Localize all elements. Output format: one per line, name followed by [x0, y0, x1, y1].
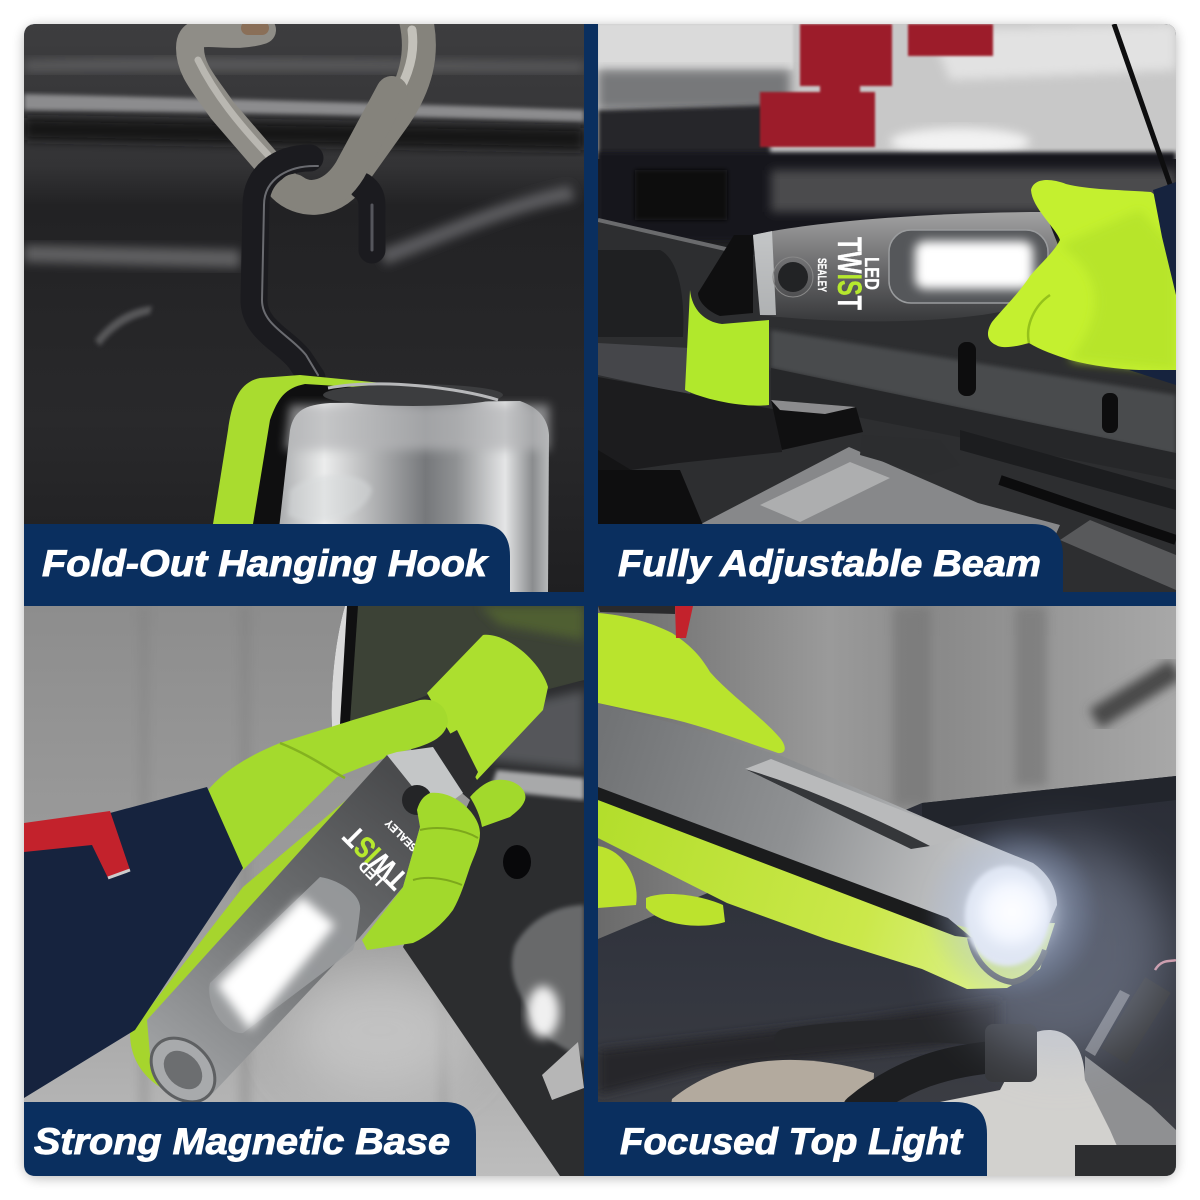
printed lamp branding: TWIST: [830, 237, 868, 310]
red cuff: [675, 606, 693, 638]
label: fold-out hanging hook: [24, 524, 584, 606]
navy sleeve: [1129, 182, 1176, 385]
icon: black folding hook: [254, 158, 372, 378]
printed lamp branding: LED: [860, 257, 882, 290]
coolant reservoir and hoses: [660, 960, 1176, 1176]
light glow: [928, 828, 1092, 992]
label: fully adjustable beam: Fully Adjustable Beam: [618, 543, 1041, 584]
label: fold-out hanging hook: Fold-Out Hanging Hook: [42, 543, 490, 584]
label: strong magnetic base: Strong Magnetic Base: [34, 1121, 450, 1162]
printed lamp branding: [815, 237, 882, 310]
icon: green glove upper: [208, 700, 448, 870]
label: fully adjustable beam: [584, 524, 1176, 606]
red engine stand: [760, 24, 993, 147]
printed lamp branding: SEALEY: [383, 816, 420, 853]
metal bracket: [771, 400, 863, 450]
label: focused top light: [584, 1102, 987, 1176]
icon: glove behind lamp: [598, 846, 725, 926]
printed lamp branding: SEALEY: [815, 258, 829, 292]
printed lamp branding: TWIST: [338, 819, 414, 895]
printed lamp branding: LED: [355, 858, 386, 889]
navy sleeve: [24, 787, 243, 1098]
panel: focused top light: [598, 606, 1176, 1176]
lamp on green magnetic base: [685, 212, 1060, 406]
engine bay: [598, 220, 1176, 592]
red cuff: [24, 811, 130, 878]
lamp body: [130, 747, 463, 1115]
panel: strong magnetic base: [24, 606, 584, 1176]
engine cover: [702, 447, 1060, 534]
lamp body: [598, 703, 1057, 989]
panel: fold-out hanging hook: [24, 20, 584, 592]
icon: green glove fingers: [362, 780, 525, 950]
icon: glove holding lamp: [598, 613, 785, 753]
lamp body with green base: [200, 375, 549, 592]
dark car door panel: [332, 606, 584, 1176]
icon: metal carabiner: [190, 20, 419, 198]
green tail end of lamp: [427, 635, 548, 780]
icon: lit top lamp: [965, 866, 1049, 966]
panel: fully adjustable beam: [598, 24, 1176, 592]
black cloth: [598, 377, 782, 470]
metal over hook: [294, 92, 392, 196]
label: strong magnetic base: [24, 1102, 476, 1176]
label: focused top light: Focused Top Light: [620, 1121, 964, 1162]
dark engine bay: [598, 776, 1176, 1176]
light haze: [950, 840, 1170, 1060]
icon: yellow glove: [988, 180, 1176, 371]
